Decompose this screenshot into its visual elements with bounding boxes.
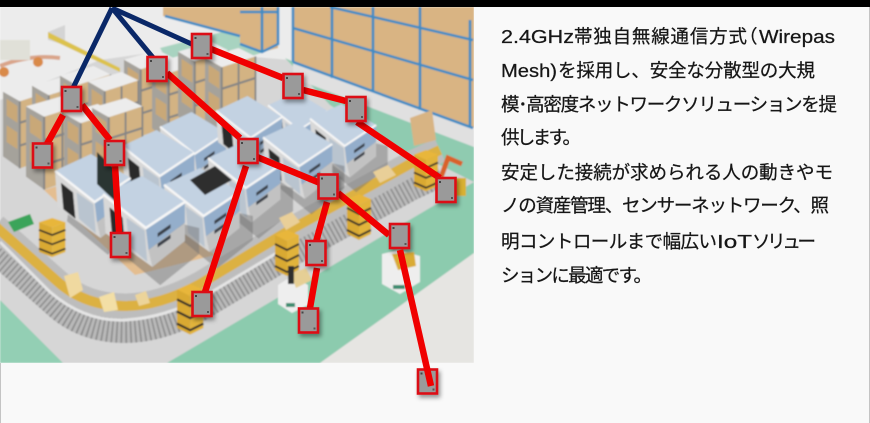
paragraph one: 帯独自無線通信方式 bbox=[574, 26, 747, 47]
paragraph one: を採用し、安全な分散型の大規 bbox=[558, 60, 815, 81]
background robots and yellow rail bbox=[0, 25, 120, 77]
paragraph two: 安定した接続が求められる人の動きやモ bbox=[501, 162, 833, 183]
paragraph two: 明コントロールまで幅広い bbox=[501, 231, 717, 252]
mesh links bbox=[47, 49, 440, 308]
network topology bbox=[33, 8, 456, 394]
paragraph two: IoT bbox=[717, 231, 752, 252]
blue warehouse racking bbox=[163, 7, 474, 128]
paragraph one: Mesh) bbox=[501, 60, 557, 81]
curved conveyor bbox=[0, 150, 440, 328]
paragraph two: ノの資産管理、センサーネットワーク、照 bbox=[501, 195, 829, 216]
top black bar bbox=[0, 0, 870, 7]
paragraph one: 供します。 bbox=[501, 127, 581, 148]
yellow parts carts bbox=[39, 150, 438, 335]
paragraph two: ションに最適です。 bbox=[501, 265, 652, 286]
autonomous mobile robots bbox=[278, 250, 420, 313]
paragraph one: 模･高密度ネットワークソリューションを提 bbox=[501, 94, 837, 115]
paragraph one: 2.4GHz bbox=[501, 26, 574, 47]
gateway links bbox=[72, 8, 196, 90]
description text bbox=[501, 26, 837, 286]
orange robot arm bbox=[440, 158, 466, 196]
link ending on the far node bbox=[400, 250, 431, 386]
paragraph two bbox=[501, 162, 833, 286]
storage shelving units bbox=[3, 42, 255, 190]
paragraph one: Wirepas bbox=[759, 26, 835, 47]
mesh nodes bbox=[33, 34, 456, 394]
floor and walls bbox=[0, 7, 474, 363]
boxes on conveyor bbox=[64, 110, 436, 312]
paragraph one: （ bbox=[739, 26, 758, 47]
factory floor illustration bbox=[0, 7, 474, 363]
assembly machines bbox=[55, 92, 388, 285]
paragraph two: ソリュー bbox=[752, 231, 816, 252]
paragraph one bbox=[501, 26, 837, 148]
